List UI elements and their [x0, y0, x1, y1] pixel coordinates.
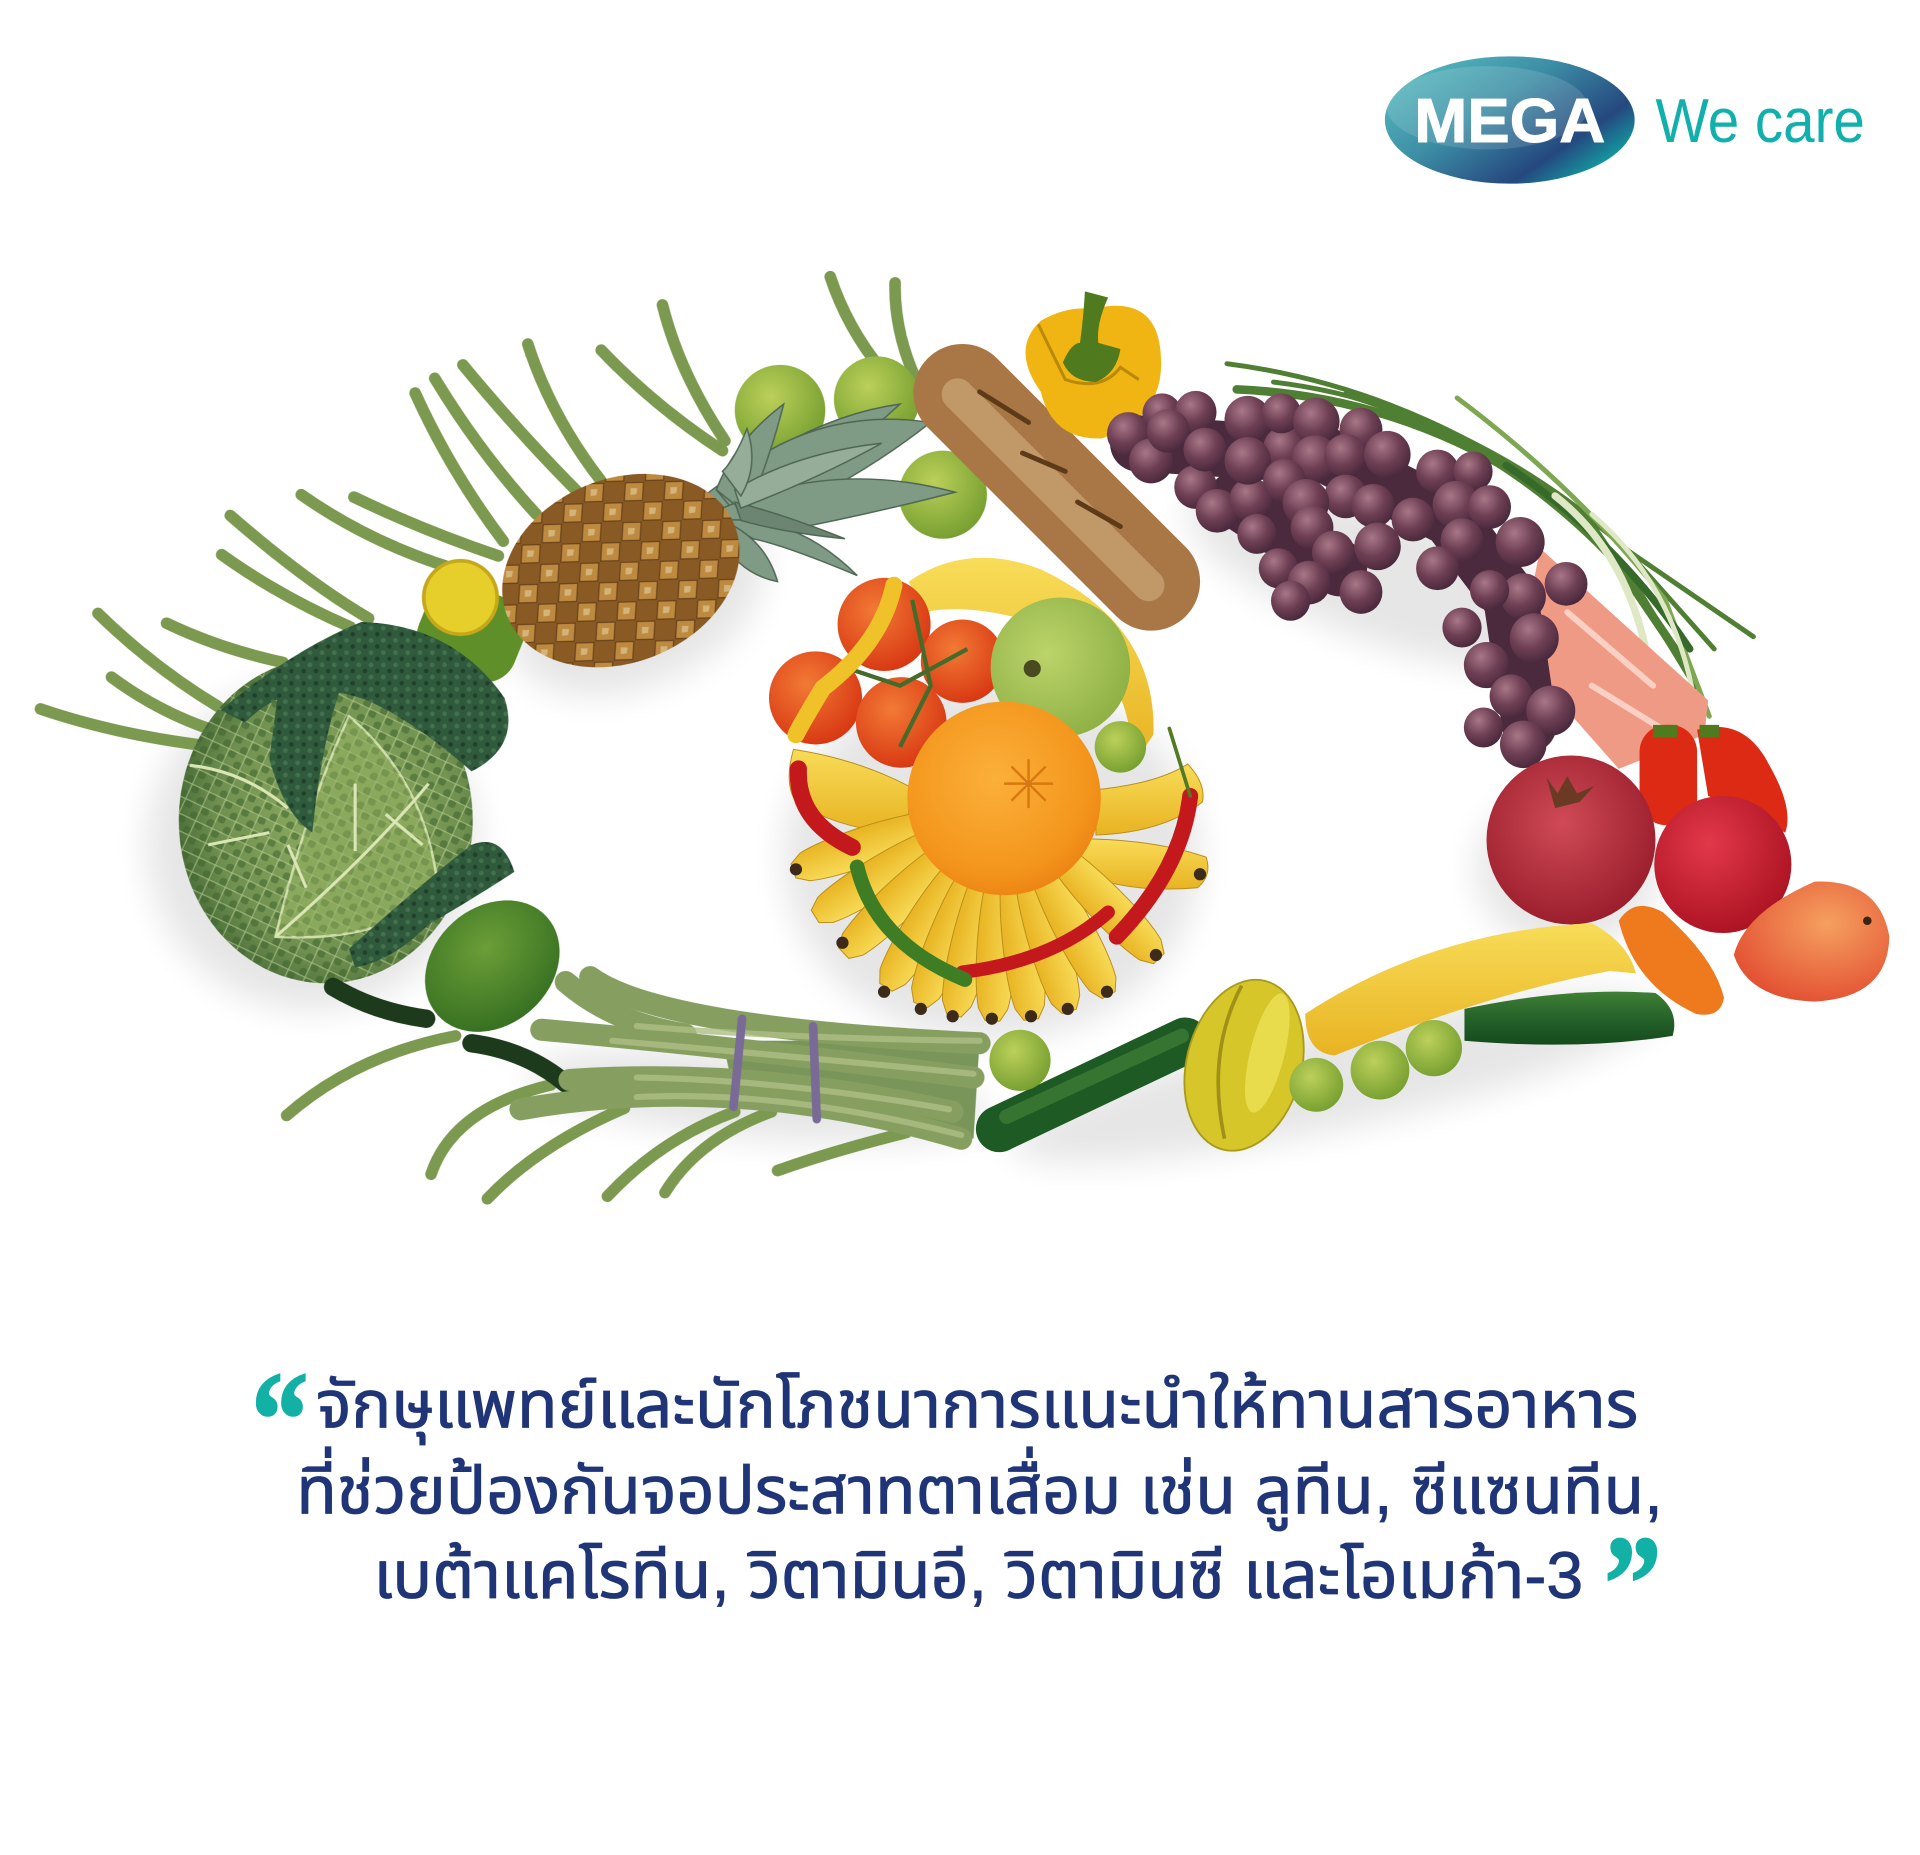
orange pepper — [1619, 906, 1724, 1015]
red sweet peppers — [1640, 725, 1787, 833]
cabbage head — [179, 658, 473, 983]
large banana arc — [909, 558, 1154, 765]
banana hand radiating around the orange — [787, 809, 1206, 1025]
long banana — [1305, 923, 1636, 1055]
chili peppers — [798, 729, 1190, 980]
jalapeno peppers — [333, 987, 566, 1084]
eye illustration made of fruit and vegetables — [40, 277, 1889, 1199]
pineapple body — [473, 440, 769, 702]
quote line 2: ที่ช่วยป้องกันจอประสาทตาเสื่อม เช่น ลูทีน, ซีแซนทีน, — [296, 1446, 1663, 1531]
star fruit — [1167, 967, 1321, 1164]
asparagus bundle — [520, 977, 980, 1139]
kale leaves — [220, 622, 508, 771]
tomato vines — [845, 600, 967, 747]
pineapple crown — [704, 404, 955, 582]
salmon fillet — [1518, 549, 1708, 769]
right cucumber — [1464, 992, 1674, 1045]
logo oval — [1385, 56, 1635, 184]
yellow chili — [796, 585, 894, 735]
yellow bell pepper — [1026, 291, 1161, 438]
lower cucumber — [999, 1036, 1185, 1129]
upper hand of bananas — [789, 749, 1208, 889]
purple rubber bands — [733, 1019, 742, 1107]
red pear — [1734, 881, 1889, 1002]
tomatoes — [769, 578, 1004, 768]
small limes — [989, 1020, 1462, 1112]
avocado — [398, 873, 586, 1059]
cabbage — [179, 622, 514, 983]
logo: MEGA We care — [1385, 56, 1865, 184]
green apple — [991, 598, 1130, 737]
red apple — [1654, 796, 1791, 933]
limes behind the pineapple crown — [735, 356, 987, 539]
eye iris: central fruit cluster — [769, 558, 1208, 1025]
soft shadows — [147, 441, 1669, 1197]
MEGA wordmark: MEGA — [1414, 86, 1605, 156]
quotation text block — [251, 1344, 1663, 1660]
pomegranate — [1487, 755, 1655, 924]
opening quote mark: “ — [251, 1344, 309, 1496]
We care tagline: We care — [1655, 86, 1865, 156]
grape bunch — [1107, 391, 1588, 768]
quote line 3: เบต้าแคโรทีน, วิตามินอี, วิตามินซี และโอเมก้า-3 — [374, 1539, 1583, 1613]
green onions — [1227, 364, 1753, 716]
orange — [907, 702, 1101, 895]
pineapple — [473, 404, 955, 702]
closing quote mark: ” — [1604, 1508, 1662, 1660]
green beans: eyelashes — [40, 277, 916, 1199]
small lime — [1095, 721, 1146, 773]
juice bottle — [407, 561, 536, 692]
bread loaf — [893, 324, 1220, 651]
quote line 1: จักษุแพทย์และนักโภชนาการแนะนำให้ทานสารอาหาร — [316, 1369, 1638, 1445]
logo highlight — [1387, 66, 1588, 149]
